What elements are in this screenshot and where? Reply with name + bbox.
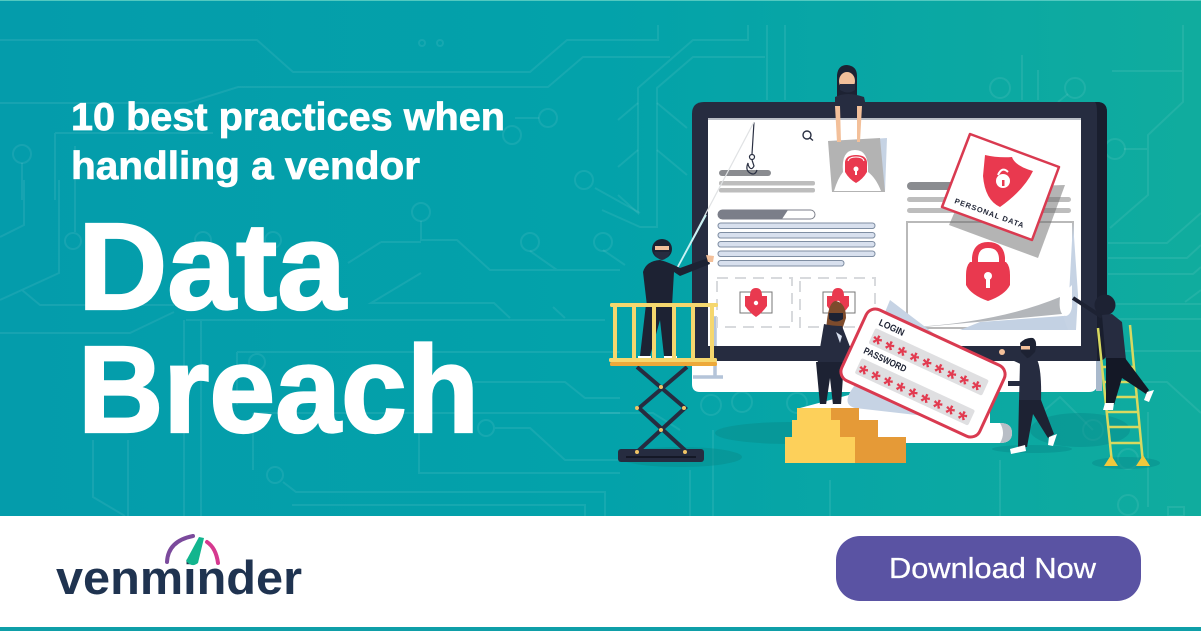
icon: large red padlock <box>966 245 1010 301</box>
label: password: PASSWORD <box>862 346 908 375</box>
figure: yellow scissor lift <box>609 303 718 462</box>
card: login and password <box>837 306 1008 441</box>
icon: stacked gold steps <box>785 408 906 463</box>
panel: blue papers behind login card <box>848 300 1000 420</box>
label: login: LOGIN <box>877 317 906 339</box>
login field: ********* <box>866 330 988 406</box>
logo gauge <box>167 536 218 565</box>
icon: small padlock tiles <box>717 278 875 327</box>
password field: ********* <box>852 360 975 436</box>
main heading: subtitle <box>71 96 505 188</box>
circuit pattern background <box>0 25 1201 516</box>
screen: left article bars <box>718 170 875 266</box>
figure: woman on top of monitor <box>835 65 866 142</box>
main heading: Data Breach: Data <box>78 199 348 336</box>
icon: shield with padlock <box>983 155 1033 207</box>
figure: man on yellow ladder <box>1073 294 1154 466</box>
figure: man holding card <box>999 338 1057 454</box>
figure: man with pole on lift <box>638 122 754 360</box>
icon: search <box>803 131 813 140</box>
icon: fishing hook <box>747 122 757 174</box>
main heading: subtitle: handling a vendor <box>71 145 420 188</box>
button: download now <box>836 536 1141 601</box>
illustration: ground shadows <box>618 413 1160 469</box>
card: personal data <box>942 134 1065 258</box>
logo: venminder <box>56 536 302 604</box>
panel: right article and paper <box>907 182 1078 330</box>
logo wordmark: venminder <box>56 551 302 604</box>
main heading: subtitle: 10 best practices when <box>71 96 505 139</box>
icon: locked profile card <box>828 138 887 192</box>
illustration: monitor <box>692 102 1107 443</box>
panel: white footer <box>0 516 1201 627</box>
main heading: Data Breach <box>78 199 479 459</box>
button: download now: Download Now <box>889 553 1097 585</box>
main heading: Data Breach: Breach <box>78 322 479 459</box>
label: personal data: PERSONAL DATA <box>953 196 1027 231</box>
figure: woman standing on steps <box>816 301 852 408</box>
